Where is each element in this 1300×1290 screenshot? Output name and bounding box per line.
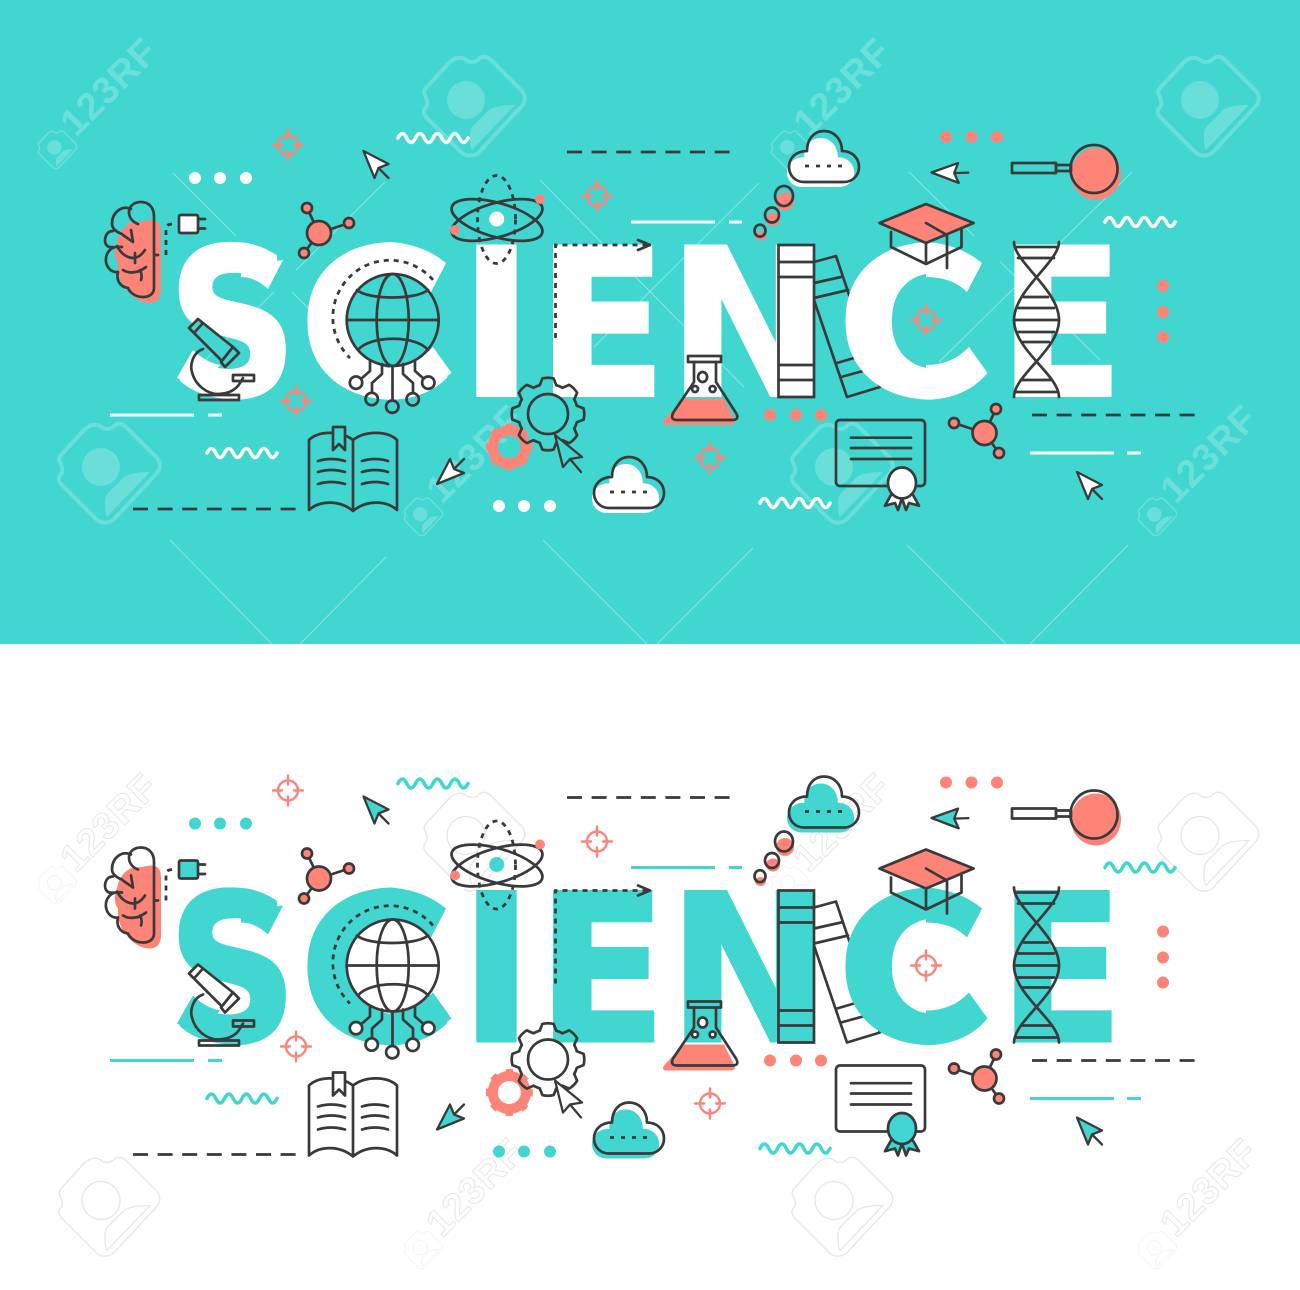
title: SCIENCE: C: [836, 207, 999, 444]
icon: gear with cursor: [512, 1023, 584, 1118]
arrow head: [638, 240, 650, 250]
title: SCIENCE: N: [668, 205, 829, 444]
watermark stamps: 123RF: [786, 30, 900, 144]
title: SCIENCE: E: [537, 851, 667, 1090]
accent dots row lower: [493, 1146, 556, 1158]
watermark stamps: 123RF: [53, 30, 167, 144]
icon: microscope: [189, 319, 254, 400]
watermark stamps: 123RF: [786, 766, 900, 880]
title: SCIENCE: N: [668, 850, 829, 1089]
icon: dna: [1014, 242, 1059, 397]
icon: gear with cursor: [512, 378, 584, 472]
accent dots row: [189, 172, 252, 184]
icon: upright book: [778, 245, 814, 397]
title: SCIENCE: C: [298, 206, 460, 445]
icon: cursor top left: [364, 151, 388, 178]
coral dots row centre: [764, 409, 827, 421]
icon: certificate: [836, 420, 925, 510]
icon: upright book: [778, 890, 814, 1042]
icon: cloud top: [787, 776, 859, 832]
coral dots column: [1157, 926, 1169, 988]
icon: thought bubbles: [754, 832, 794, 886]
panel: white bottom background: [0, 644, 1300, 1290]
watermark stamps: 123RF: [1153, 397, 1267, 511]
coral dots row centre: [764, 1054, 827, 1066]
icon: globe: [333, 260, 439, 413]
accent lines: [110, 222, 1141, 453]
title: SCIENCE: S: [167, 205, 298, 444]
target markers: [273, 776, 941, 1118]
icon: open book: [309, 1072, 397, 1156]
icon: cloud bottom: [592, 457, 664, 513]
icon: plug: [166, 215, 205, 255]
accent dots row lower: [493, 500, 556, 512]
dashed lines: [133, 798, 1195, 1154]
title: SCIENCE: E: [999, 205, 1124, 444]
icon: coral cog: [489, 1072, 530, 1113]
icon: molecule left: [299, 848, 354, 904]
target markers: [273, 130, 941, 473]
icon: brain: [105, 848, 161, 948]
title: SCIENCE: E: [999, 851, 1124, 1090]
icon: magnifier: [1012, 145, 1121, 200]
icon: cursor lower right: [1077, 1118, 1102, 1144]
dashed arrow: [556, 245, 648, 338]
icon: cursor top right: [932, 154, 968, 191]
icon: plug: [166, 860, 205, 900]
letter terminal trims: [170, 236, 1000, 405]
title: SCIENCE: I: [460, 851, 533, 1090]
watermark stamps: 123RF: [419, 1131, 533, 1245]
icon: magnifier: [1012, 790, 1121, 846]
accent dots row: [189, 818, 252, 830]
icon: dna: [1014, 888, 1059, 1042]
watermark stamps: 123RF: [419, 397, 533, 511]
coral dots column: [1157, 280, 1169, 343]
watermark stamps: 123RF: [1153, 1131, 1267, 1245]
panel: white science banner: [38, 766, 1267, 1269]
icon: graduation cap: [880, 204, 974, 268]
icon: brain: [105, 202, 161, 303]
icon: cursor lower left: [437, 1104, 464, 1130]
icon: leaning book: [814, 256, 880, 397]
icon: cursor lower right: [1077, 472, 1102, 499]
icon: microscope: [189, 964, 254, 1046]
accent lines: [110, 868, 1141, 1098]
icon: flask: [663, 356, 737, 425]
panel: teal top background: [0, 0, 1300, 644]
title: SCIENCE: I: [460, 206, 533, 444]
watermark stamps: [38, 30, 1267, 644]
icon: graduation cap: [880, 850, 974, 914]
icon: cursor top left: [364, 796, 388, 824]
icon: molecule right: [949, 404, 1004, 458]
icon: open book: [309, 427, 397, 511]
icon: cursor top right: [932, 800, 968, 836]
icon: flask: [663, 1002, 737, 1070]
watermark stamps: [38, 766, 1267, 1269]
icon: globe: [333, 906, 439, 1058]
icon: thought bubbles: [754, 186, 794, 240]
title: SCIENCE: E: [537, 206, 667, 444]
title: SCIENCE: C: [298, 851, 460, 1090]
watermark stamps: 123RF: [53, 766, 167, 880]
icon: atom: [447, 821, 547, 909]
title: SCIENCE: C: [836, 852, 999, 1090]
panel: teal science banner: [38, 30, 1267, 644]
coral dots row top right: [940, 776, 1003, 788]
title: SCIENCE: [167, 850, 1124, 1090]
title: SCIENCE: S: [167, 850, 298, 1090]
icon: molecule left: [299, 203, 354, 258]
dashed arrow: [556, 890, 648, 984]
icon: coral cog: [489, 426, 530, 468]
dashed lines: [133, 152, 1195, 509]
icon: cursor lower left: [437, 459, 464, 484]
title: SCIENCE: [167, 205, 1124, 445]
arrow head: [638, 886, 650, 896]
coral dots row top right: [940, 131, 1003, 143]
icon: leaning book: [814, 902, 880, 1042]
letter terminal trims: [170, 882, 1000, 1050]
squiggles: [207, 779, 1175, 1153]
icon: certificate: [836, 1066, 925, 1156]
icon: molecule right: [949, 1050, 1004, 1104]
icon: cloud bottom: [592, 1102, 664, 1158]
icon: cloud top: [787, 131, 859, 187]
icon: atom: [447, 176, 547, 264]
squiggles: [207, 134, 1175, 508]
